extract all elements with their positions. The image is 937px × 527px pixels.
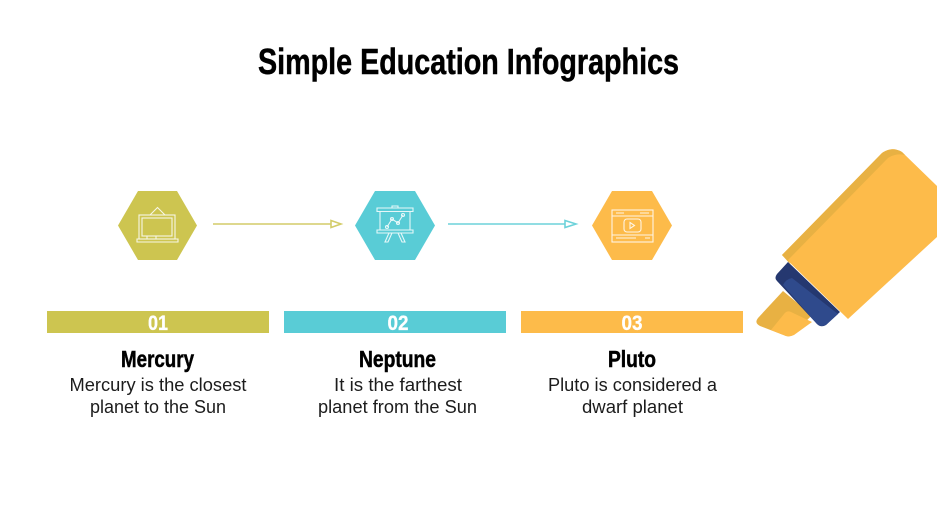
number bar 03 [521,311,743,333]
number 01: 01 [148,312,168,335]
title: Simple Education Infographics [258,41,679,82]
number 02: 02 [388,312,408,335]
icon: presentation chart hexagon [355,191,435,260]
highlighter tip [756,291,812,336]
description: Neptune: It is the farthest [334,375,462,395]
description: Pluto: dwarf planet [582,397,683,417]
number bar 01 [47,311,269,333]
description: Neptune: planet from the Sun [318,397,477,417]
icon: chalkboard hexagon [118,191,197,260]
icon: highlighter [756,149,937,336]
description: Pluto: Pluto is considered a [548,375,718,395]
heading: Mercury: Mercury [121,346,194,372]
description: Neptune [318,375,477,417]
arrow: step 2 to step 3 [448,220,576,228]
description: Mercury [70,375,246,417]
description: Mercury: planet to the Sun [90,397,226,417]
arrow: step 1 to step 2 [213,220,341,228]
panel: Neptune [284,311,506,417]
heading: Neptune: Neptune [359,346,436,372]
number 03: 03 [622,312,642,335]
icon: video player hexagon [592,191,672,260]
description: Mercury: Mercury is the closest [70,375,246,395]
description: Pluto [548,375,718,417]
panel: Mercury [47,311,269,417]
number bar 02 [284,311,506,333]
heading: Pluto: Pluto [608,346,656,372]
panel: Pluto [521,311,743,417]
highlighter body [782,149,937,319]
highlighter collar [776,262,840,326]
